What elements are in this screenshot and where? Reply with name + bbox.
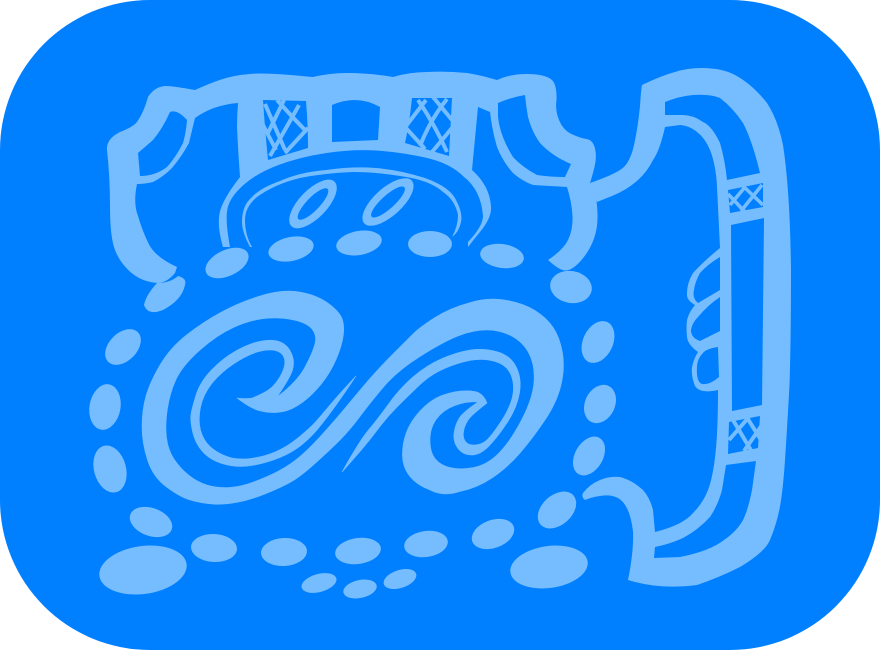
- inner arc: [242, 167, 461, 247]
- small bead 3: [381, 565, 419, 593]
- ringed oval right: [355, 170, 421, 234]
- right bead 3: [566, 431, 612, 481]
- frame lobe: [144, 276, 185, 312]
- crown lattice right: [405, 97, 452, 156]
- bottom bead 6: [531, 484, 583, 536]
- glyph artwork: [86, 68, 791, 601]
- crown lattice left: [263, 100, 308, 160]
- top bead 1: [201, 241, 253, 285]
- bottom bead 1: [190, 533, 238, 563]
- top bead 6: [548, 268, 594, 306]
- left bead 3: [88, 442, 132, 496]
- handle lattice lower: [728, 416, 762, 454]
- left bead 1: [98, 322, 148, 372]
- left bead 4: [126, 501, 176, 543]
- right side handle: [582, 68, 791, 587]
- small bead 2: [342, 577, 378, 601]
- right bead 1: [575, 316, 621, 368]
- top bead 3: [334, 227, 384, 259]
- handle lattice upper: [728, 183, 763, 213]
- left bead 2: [86, 382, 124, 432]
- top bead 5: [479, 241, 525, 271]
- bottom bead 5: [468, 513, 518, 555]
- central double swirl: [142, 291, 563, 504]
- bottom large bead left: [96, 540, 190, 600]
- ringed oval left: [281, 172, 345, 236]
- top crown frame: [107, 72, 598, 283]
- right bead 2: [578, 380, 622, 428]
- bottom bead 4: [402, 528, 450, 560]
- bottom bead 3: [333, 535, 383, 567]
- top bead 4: [408, 231, 452, 257]
- small bead 1: [299, 570, 339, 596]
- bottom large bead right: [507, 541, 591, 593]
- bottom bead 2: [260, 537, 308, 567]
- top bead 2: [266, 232, 316, 266]
